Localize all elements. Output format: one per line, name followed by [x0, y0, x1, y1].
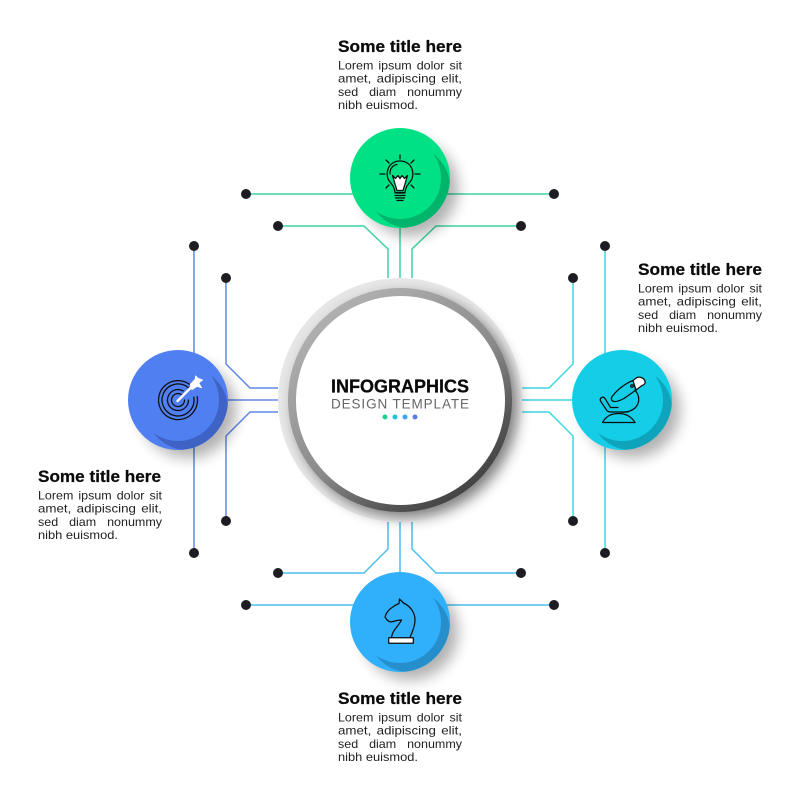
center subheading: DESIGN TEMPLATE — [331, 396, 469, 412]
right title: Some title here — [638, 261, 762, 279]
left body copy: Lorem ipsum dolor sit — [38, 488, 163, 502]
right body copy: amet, adipiscing elit, — [638, 294, 762, 308]
top body copy: Lorem ipsum dolor sit — [338, 58, 463, 72]
node: left blue — [128, 350, 236, 458]
top body copy: amet, adipiscing elit, — [338, 72, 462, 86]
top body copy: nibh euismod. — [338, 98, 418, 112]
node: top green — [350, 128, 458, 236]
bottom body copy: Lorem ipsum dolor sit — [338, 710, 463, 724]
icon: microscope — [600, 377, 645, 422]
icon: chess knight — [385, 599, 415, 643]
icon: target with dart — [159, 376, 203, 420]
connector lines: bottom light blue — [241, 522, 559, 610]
node: bottom light blue — [350, 572, 458, 680]
top body copy — [338, 58, 463, 112]
top title: Some title here — [338, 38, 462, 56]
left body copy — [38, 488, 163, 542]
text block: left — [38, 468, 163, 542]
bottom body copy: amet, adipiscing elit, — [338, 724, 462, 738]
bottom body copy — [338, 710, 463, 764]
connector lines: left blue — [189, 241, 278, 558]
connector lines: right cyan — [522, 241, 610, 558]
center color dots — [382, 414, 418, 420]
central circle — [278, 278, 522, 522]
bottom title: Some title here — [338, 690, 462, 708]
text block: top — [338, 38, 463, 112]
center heading: INFOGRAPHICS — [331, 376, 469, 396]
right body copy: nibh euismod. — [638, 321, 718, 335]
right body copy: Lorem ipsum dolor sit — [638, 282, 763, 296]
right body copy — [638, 282, 763, 335]
left body copy: amet, adipiscing elit, — [38, 502, 162, 516]
connector lines: top green — [241, 189, 559, 278]
left body copy: nibh euismod. — [38, 528, 118, 542]
top body copy: sed diam nonummy — [338, 85, 462, 99]
left title: Some title here — [38, 468, 161, 486]
bottom body copy: nibh euismod. — [338, 750, 418, 764]
bottom body copy: sed diam nonummy — [338, 737, 462, 751]
right body copy: sed diam nonummy — [638, 308, 762, 322]
icon: light bulb — [380, 155, 420, 200]
left body copy: sed diam nonummy — [38, 515, 162, 529]
text block: right — [638, 261, 763, 335]
node: right cyan — [572, 350, 680, 458]
text block: bottom — [338, 690, 463, 764]
